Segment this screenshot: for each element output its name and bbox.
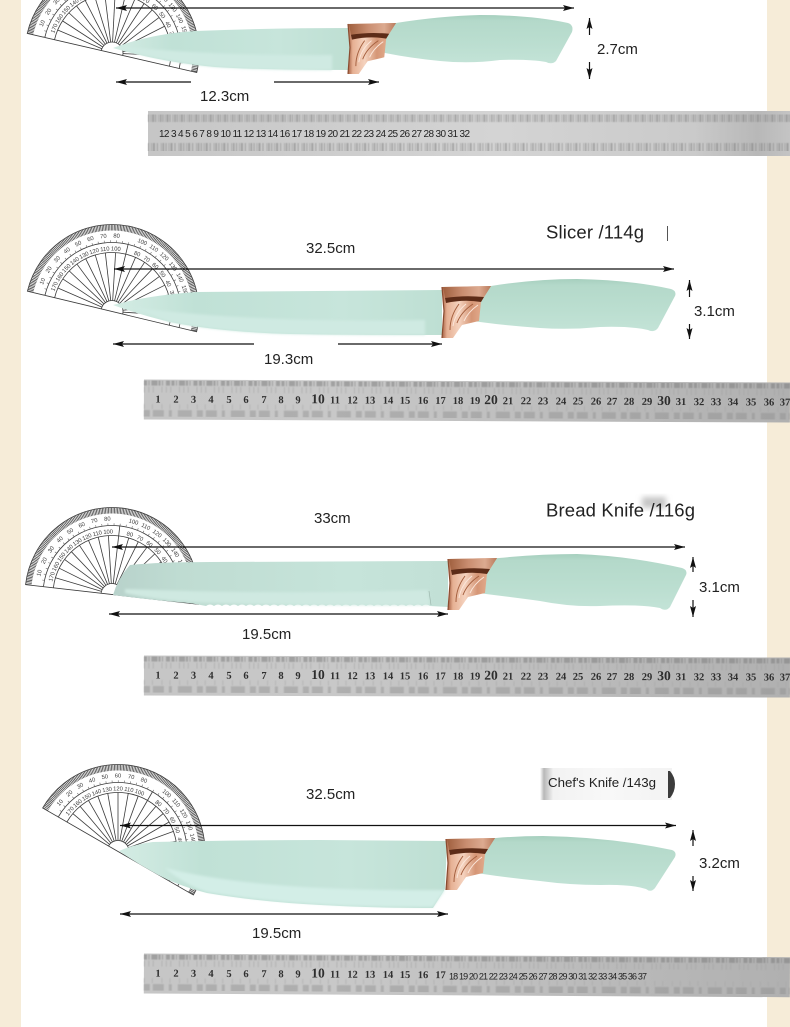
left beige strip <box>0 0 21 1027</box>
protractor 2: 60 <box>87 236 95 243</box>
protractor 3: 160 <box>181 572 189 582</box>
total length label 3: 33cm <box>314 510 351 527</box>
right beige strip <box>767 0 790 1027</box>
ruler 2: 30 <box>657 393 671 408</box>
protractor 2: 10 <box>39 277 47 286</box>
ruler 3: 10 <box>311 667 325 682</box>
protractor 3: 170 <box>184 585 190 595</box>
protractor 4: 30 <box>76 782 85 791</box>
protractor 1: 60 <box>150 3 159 12</box>
protractor 2: 150 <box>180 285 188 296</box>
ruler 4: 7 <box>261 969 267 980</box>
protractor 4: 120 <box>178 808 188 820</box>
ruler 3: 29 <box>642 672 652 683</box>
ruler 2: 28 <box>624 397 634 408</box>
ruler 3: 23 <box>538 672 548 683</box>
ruler 3: 27 <box>607 672 617 683</box>
protractor 3: 110 <box>92 530 103 538</box>
protractor 4: 40 <box>88 777 96 785</box>
ruler 1 <box>148 111 790 156</box>
ruler 2: 32 <box>694 397 704 408</box>
width arrow 4 down <box>692 876 694 891</box>
protractor 4: 110 <box>170 798 181 809</box>
total length arrow 1 <box>116 7 574 9</box>
protractor 3: 20 <box>169 576 176 584</box>
ruler 3: 19 <box>470 672 480 683</box>
ruler 2: 19 <box>470 396 480 407</box>
protractor 2: 70 <box>100 234 107 240</box>
ruler 2: 8 <box>278 395 284 406</box>
ruler 2: 23 <box>538 396 548 407</box>
ruler 4: 4 <box>208 969 214 980</box>
protractor 3: 60 <box>78 522 86 530</box>
ruler 3: 35 <box>746 672 756 683</box>
width label 3: 3.1cm <box>699 579 740 596</box>
bolster 3 <box>448 558 497 610</box>
width label 2: 3.1cm <box>694 303 735 320</box>
ruler 2: 13 <box>365 396 375 407</box>
protractor 1: 170 <box>50 23 60 34</box>
ruler 2: 11 <box>330 395 340 406</box>
protractor 2: 100 <box>111 246 121 253</box>
protractor 4: 140 <box>188 833 196 844</box>
protractor 2: 50 <box>74 240 83 249</box>
blade length label 4: 19.5cm <box>252 925 301 942</box>
protractor 3: 30 <box>165 566 173 574</box>
ruler 2: 12 <box>347 395 358 407</box>
ruler 2: 24 <box>556 396 567 407</box>
ruler 3: 3 <box>191 671 196 682</box>
protractor 3: 110 <box>140 523 151 532</box>
ruler 2 <box>144 380 790 423</box>
protractor 4: 80 <box>140 777 148 785</box>
ruler 3: 5 <box>226 671 232 682</box>
protractor 4: 70 <box>127 774 135 781</box>
blade length arrow 2 left <box>113 343 254 345</box>
ruler 2: 10 <box>311 391 325 406</box>
ruler 4: 12 <box>347 970 358 981</box>
protractor 3: 30 <box>47 546 56 554</box>
protractor 2: 20 <box>170 301 177 308</box>
protractor 4: 170 <box>65 806 76 817</box>
handle 4 <box>475 836 676 891</box>
ruler 3: 4 <box>208 671 214 682</box>
label text: Chef's Knife /143g <box>548 775 656 790</box>
protractor 4: 50 <box>101 774 109 781</box>
protractor 3: 130 <box>161 537 172 548</box>
ruler 3: 1 <box>155 671 161 682</box>
protractor 4 <box>43 733 237 895</box>
protractor 3: 120 <box>82 533 93 542</box>
bolster 1 <box>348 23 396 74</box>
protractor 1: 160 <box>183 39 190 49</box>
bolster 2 <box>442 286 491 338</box>
width label 4: 3.2cm <box>699 855 740 872</box>
protractor 3: 140 <box>169 547 180 559</box>
product label: slicer: Slicer /114g <box>546 222 644 242</box>
ruler 2: 5 <box>226 395 232 406</box>
handle 2 <box>472 279 676 331</box>
width arrow 3 up <box>692 557 694 572</box>
protractor 1: 40 <box>163 21 171 29</box>
protractor 2: 140 <box>69 256 81 267</box>
ruler 3: 12 <box>347 671 358 682</box>
ruler 3: 37 <box>780 672 790 684</box>
protractor 4: 140 <box>91 789 102 798</box>
ruler 3: 6 <box>243 671 249 682</box>
ruler 3: 21 <box>503 672 513 683</box>
ruler 2: 33 <box>711 397 721 408</box>
ruler 3: 16 <box>418 671 428 682</box>
total length arrow 3 <box>112 546 685 548</box>
protractor 4: 170 <box>184 872 193 883</box>
panel: chef's knife <box>43 733 740 942</box>
ruler 4: 11 <box>330 970 340 981</box>
protractor 2: 110 <box>100 246 110 253</box>
total length label 4: 32.5cm <box>306 786 355 803</box>
bolster 4 <box>446 838 495 890</box>
ruler 2: 25 <box>573 397 583 408</box>
ruler 2: 4 <box>208 395 214 406</box>
protractor 1: 140 <box>174 13 184 25</box>
protractor 3: 10 <box>171 587 177 594</box>
blade length arrow 1 left <box>116 81 191 83</box>
protractor 1: 10 <box>39 20 47 28</box>
protractor 2: 80 <box>113 233 120 240</box>
ruler 2: 26 <box>591 397 601 408</box>
protractor 2: 140 <box>174 272 184 284</box>
protractor 3: 20 <box>41 557 49 565</box>
protractor 1: 50 <box>157 11 166 20</box>
protractor 2: 160 <box>55 272 65 283</box>
ruler 4: 5 <box>226 969 232 980</box>
ruler 3: 15 <box>400 671 410 682</box>
ruler 2: 7 <box>261 395 267 406</box>
protractor 3: 80 <box>104 516 111 523</box>
ruler 2: 2 <box>173 395 179 406</box>
width arrow 3 down <box>692 600 694 617</box>
blade 3 <box>113 561 448 607</box>
protractor 4: 50 <box>172 826 180 834</box>
panel: bread knife <box>26 497 740 643</box>
protractor 2: 40 <box>63 247 72 256</box>
width arrow 1 down <box>588 62 590 79</box>
protractor 3: 70 <box>135 535 144 543</box>
handle 3 <box>478 554 686 610</box>
protractor 4: 20 <box>65 790 74 798</box>
ruler 4: 13 <box>365 970 375 981</box>
blade length arrow 2 right <box>338 343 442 345</box>
protractor 2: 30 <box>168 290 175 298</box>
protractor 2: 10 <box>171 312 177 319</box>
protractor 2: 130 <box>167 261 178 273</box>
protractor 1: 30 <box>167 31 175 39</box>
protractor 3: 40 <box>56 536 65 544</box>
protractor 2: 50 <box>158 270 166 279</box>
protractor 2: 150 <box>62 263 73 274</box>
width arrow 2 down <box>688 324 690 339</box>
panel: slicer <box>27 207 735 368</box>
protractor 4: 30 <box>177 848 183 855</box>
ruler 2: 37 <box>780 397 790 409</box>
protractor 1: 20 <box>170 42 177 49</box>
ruler 4: 8 <box>278 969 284 980</box>
protractor 1: 150 <box>61 5 72 16</box>
protractor 3: 70 <box>91 518 98 525</box>
blade 2 <box>113 290 442 335</box>
protractor 4: 160 <box>188 859 196 870</box>
ruler 3: 7 <box>261 671 267 682</box>
protractor 1: 150 <box>179 26 188 37</box>
ruler 3: 28 <box>624 672 634 683</box>
ruler 4: 9 <box>295 969 301 980</box>
ruler 3: 14 <box>383 671 394 682</box>
protractor 3: 10 <box>36 569 44 577</box>
ruler 4: 14 <box>383 970 394 981</box>
protractor 4: 110 <box>124 787 134 794</box>
protractor 4: 10 <box>172 869 180 877</box>
protractor 3: 50 <box>153 547 161 556</box>
ruler 3: 36 <box>764 672 774 683</box>
protractor 1: 160 <box>55 14 65 25</box>
ruler 3: 25 <box>573 672 583 683</box>
ruler 4: 3 <box>191 969 196 980</box>
ruler 2: 31 <box>676 397 686 408</box>
ruler 2: 18 <box>453 396 463 407</box>
protractor 1: 130 <box>167 2 177 14</box>
ruler 3: 22 <box>521 672 531 683</box>
product label: bread knife: Bread Knife /116g <box>546 500 695 520</box>
protractor 3: 100 <box>103 529 113 536</box>
width label 1: 2.7cm <box>597 41 638 58</box>
ruler 3: 20 <box>484 668 498 683</box>
protractor 2 <box>27 207 217 332</box>
blade length label 3: 19.5cm <box>242 626 291 643</box>
protractor 3: 80 <box>126 531 134 539</box>
ruler 4 <box>144 954 790 997</box>
ruler 2: 17 <box>435 396 446 407</box>
protractor 4: 80 <box>153 800 162 808</box>
width arrow 4 up <box>692 830 694 846</box>
protractor 4: 130 <box>102 787 113 794</box>
protractor 4: 120 <box>113 786 123 792</box>
ruler 3: 32 <box>694 672 704 683</box>
ruler 3: 26 <box>591 672 601 683</box>
protractor 1: 20 <box>45 8 53 16</box>
protractor 2: 130 <box>79 251 90 261</box>
protractor 3: 100 <box>128 518 139 527</box>
blade length label 2: 19.3cm <box>264 351 313 368</box>
protractor 4: 100 <box>134 789 145 798</box>
ruler 4: 6 <box>243 969 249 980</box>
ruler 2: 22 <box>521 396 531 407</box>
protractor 2: 30 <box>53 255 62 264</box>
protractor 3: 120 <box>151 529 162 539</box>
handle 1 <box>375 15 572 63</box>
protractor 1: 170 <box>184 52 190 62</box>
ruler 3: 8 <box>278 671 284 682</box>
ruler 3: 18 <box>453 671 463 683</box>
protractor 2: 70 <box>142 256 151 264</box>
ruler 2: 16 <box>418 396 428 407</box>
protractor 4: 150 <box>190 847 196 856</box>
protractor 3: 160 <box>52 561 61 573</box>
blade 1 <box>113 28 350 70</box>
protractor 2: 120 <box>158 252 169 263</box>
ruler 4: 10 <box>311 965 325 981</box>
ruler 2: 1 <box>155 395 161 406</box>
protractor 3: 40 <box>159 556 168 565</box>
protractor 4: 60 <box>167 816 176 825</box>
ruler 3: 31 <box>676 672 686 683</box>
ruler 4: 1 <box>155 969 161 980</box>
ruler 2: 20 <box>484 392 498 407</box>
protractor 2: 40 <box>163 280 172 288</box>
ruler 2: 35 <box>746 397 756 408</box>
protractor 2: 110 <box>148 244 159 254</box>
protractor 3: 140 <box>64 544 75 555</box>
ruler 3: 13 <box>365 671 375 682</box>
ruler 4: 18 19 20 21 22 23 24 25 26 27 28 29 30 31 32 33 34 35 36 37 <box>449 972 647 982</box>
ruler 2: 14 <box>383 396 394 407</box>
label bar mark <box>667 226 668 241</box>
protractor 4: 10 <box>56 799 65 808</box>
ruler 3 <box>144 656 790 698</box>
total length arrow 4 <box>120 824 676 826</box>
protractor 2: 120 <box>89 248 100 256</box>
protractor 2: 80 <box>133 251 141 259</box>
protractor 2: 160 <box>183 298 190 308</box>
protractor 2: 60 <box>150 262 159 271</box>
label end cap <box>668 771 675 798</box>
ruler 4: 17 <box>435 970 446 981</box>
ruler 3: 2 <box>173 671 179 682</box>
protractor 2: 100 <box>136 238 148 247</box>
protractor 4: 150 <box>81 793 93 803</box>
ruler 3: 11 <box>330 671 340 682</box>
protractor 4: 100 <box>161 789 172 799</box>
ruler 3: 34 <box>728 672 739 683</box>
ruler 3: 33 <box>711 672 721 683</box>
ruler 2: 36 <box>764 397 774 408</box>
width arrow 2 up <box>688 280 690 297</box>
ruler 1: 12 3 4 5 6 7 8 9 10 11 12 13 14 16 17 18 19 20 21 22 23 24 25 26 27 28 30 31 32 <box>159 129 470 140</box>
protractor 4: 160 <box>73 799 84 809</box>
total length label 2: 32.5cm <box>306 240 355 257</box>
ruler 3: 30 <box>657 668 671 683</box>
protractor 3: 150 <box>176 559 185 570</box>
protractor 4: 60 <box>115 774 121 780</box>
total length arrow 2 <box>114 268 674 270</box>
protractor 4: 20 <box>176 859 183 866</box>
blade length arrow 3 <box>109 613 448 615</box>
label smudge <box>642 497 666 508</box>
ruler 2: 15 <box>400 396 410 407</box>
ruler 2: 3 <box>191 395 196 406</box>
ruler 2: 9 <box>295 395 301 406</box>
protractor 2: 20 <box>45 266 54 274</box>
protractor 3: 50 <box>66 528 75 536</box>
ruler 3: 9 <box>295 671 301 682</box>
product label: chef's knife <box>540 768 675 800</box>
ruler 3: 24 <box>556 672 567 683</box>
protractor 2: 170 <box>50 281 60 292</box>
ruler 2: 21 <box>503 396 513 407</box>
protractor 3: 130 <box>72 538 83 548</box>
protractor 4: 70 <box>161 807 170 816</box>
ruler 2: 6 <box>243 395 249 406</box>
protractor 4: 130 <box>184 820 193 831</box>
protractor 3: 60 <box>145 540 153 549</box>
ruler 2: 34 <box>728 397 739 408</box>
ruler 4: 16 <box>418 970 428 981</box>
protractor 3: 170 <box>48 571 57 582</box>
ruler 2: 27 <box>607 397 617 408</box>
ruler 3: 17 <box>435 671 446 682</box>
blade length arrow 1 right <box>274 81 379 83</box>
ruler 4: 2 <box>173 969 179 980</box>
blade 4 <box>119 840 447 908</box>
panel: paring knife <box>27 0 638 105</box>
ruler 2: 29 <box>642 397 652 408</box>
width arrow 1 up <box>588 18 590 35</box>
ruler 4: 15 <box>400 970 410 981</box>
protractor 3: 150 <box>57 552 67 563</box>
protractor 1: 10 <box>171 53 177 60</box>
blade length label 1: 12.3cm <box>200 88 249 105</box>
label plate <box>540 768 672 800</box>
protractor 3 <box>26 498 208 604</box>
blade length arrow 4 <box>120 913 448 915</box>
protractor 1 <box>27 0 216 73</box>
protractor 4: 40 <box>176 837 183 844</box>
protractor 2: 170 <box>184 311 190 321</box>
